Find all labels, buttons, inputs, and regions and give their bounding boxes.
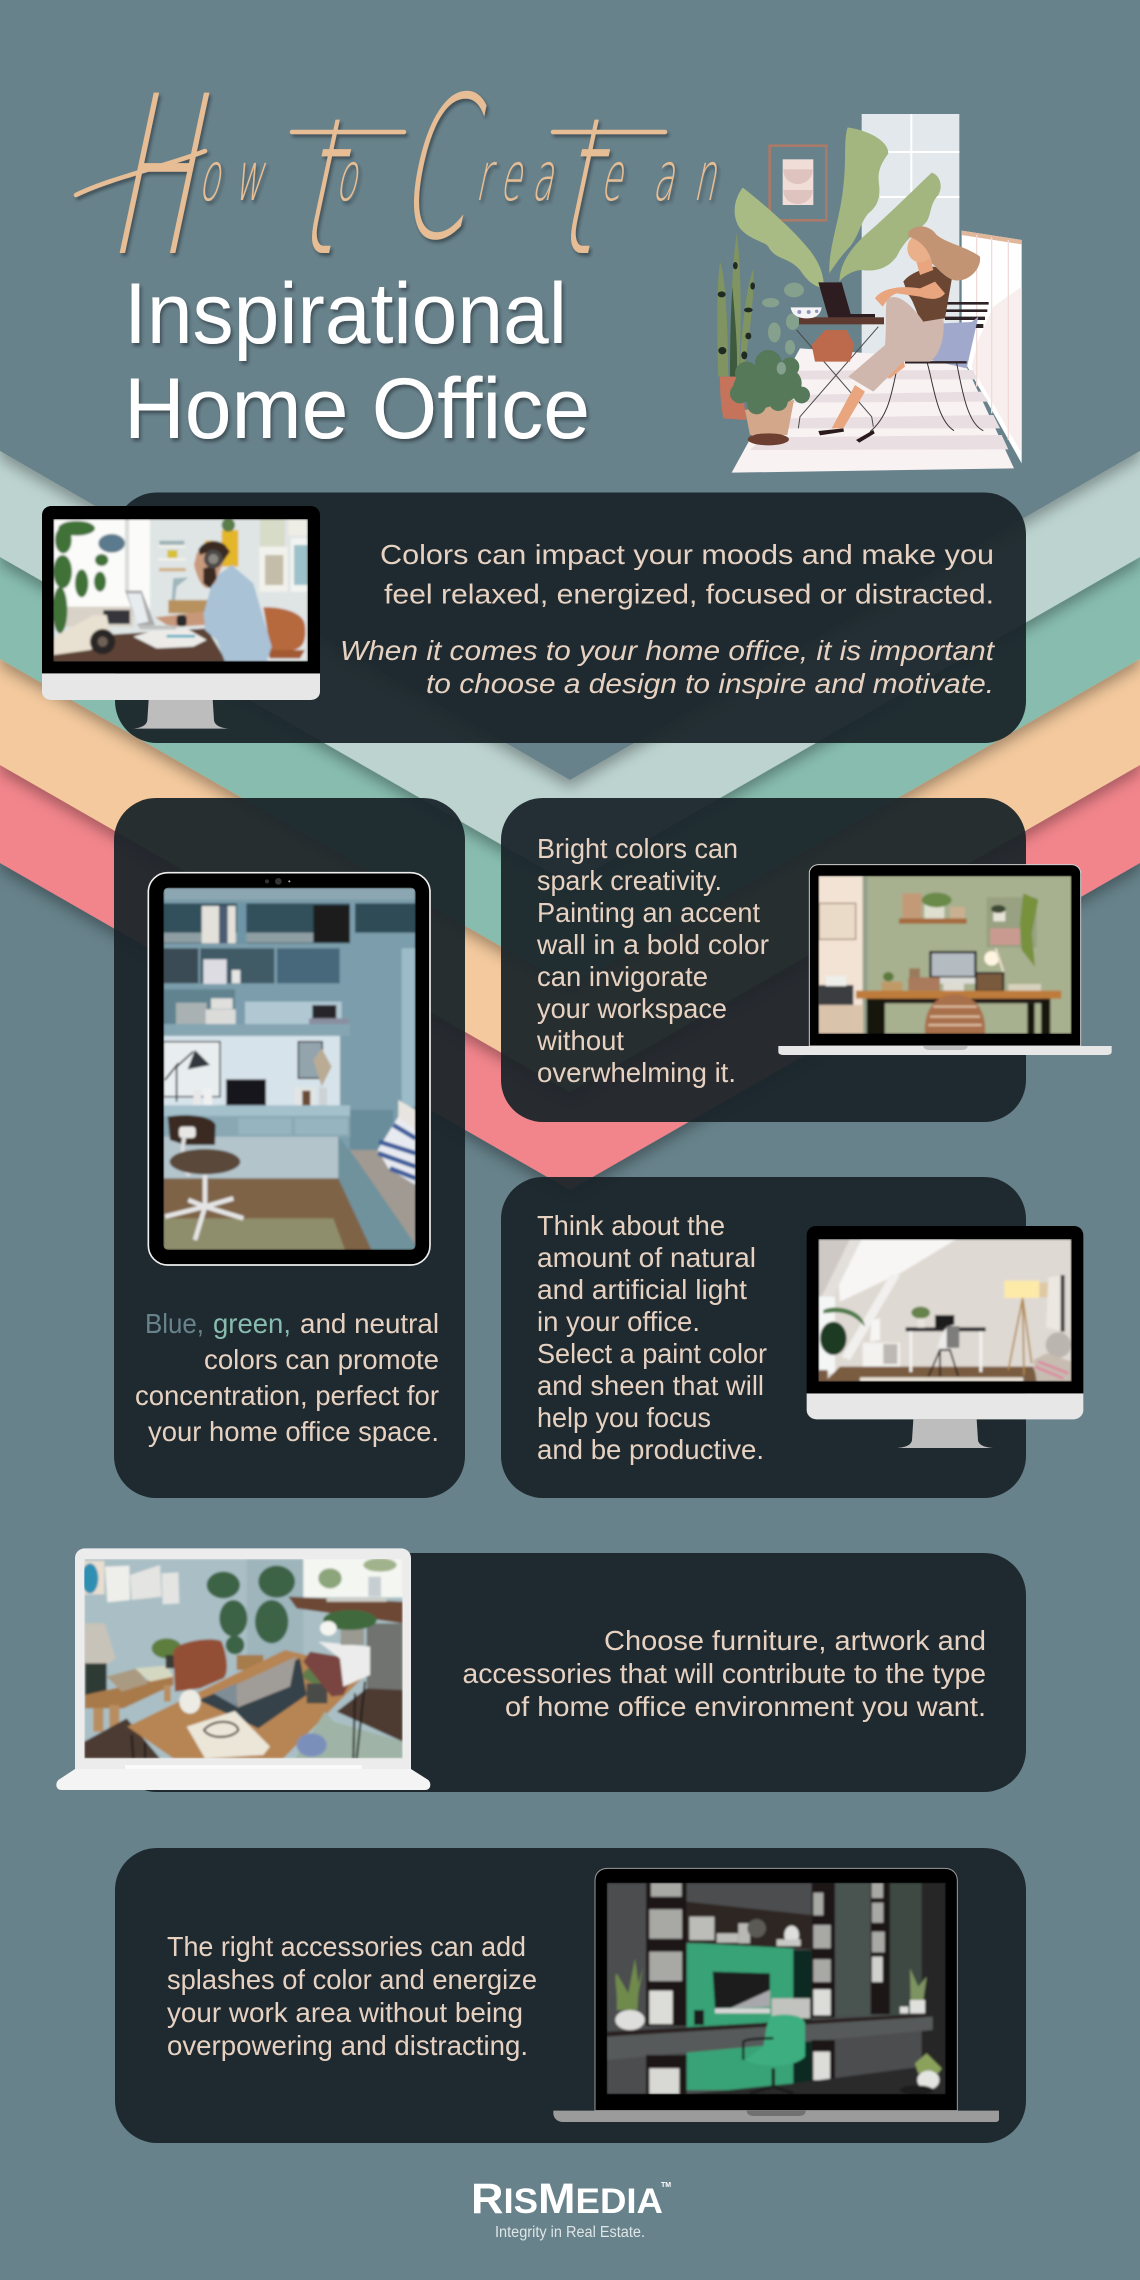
- title script line: o: [332, 137, 380, 216]
- illustration: woman working on balcony: [717, 114, 1022, 473]
- light text: help you focus: [537, 1402, 711, 1433]
- snake plant: [717, 233, 755, 377]
- bright colors text: wall in a bold color: [536, 929, 769, 960]
- light text: and artificial light: [537, 1274, 747, 1305]
- concentration text: concentration, perfect for: [135, 1380, 439, 1411]
- bright colors text: your workspace: [537, 993, 727, 1024]
- accessories text: splashes of color and energize: [167, 1964, 537, 1995]
- laptop with green wall photo: [778, 865, 1112, 1055]
- furniture text: of home office environment you want.: [505, 1691, 986, 1722]
- panel: furniture and accessories: [115, 1553, 1026, 1792]
- light text: amount of natural: [537, 1242, 756, 1273]
- intro text: [340, 539, 995, 699]
- potted green plant: [730, 350, 810, 445]
- title main heading: Inspirational: [124, 266, 567, 362]
- light text: and sheen that will: [537, 1370, 764, 1401]
- balcony wall: [962, 231, 1022, 463]
- concentration text: Blue,: [145, 1308, 204, 1339]
- title main heading: Home Office: [124, 361, 590, 457]
- dark laptop with green accent wall photo: [553, 1868, 999, 2122]
- title script line: an: [649, 137, 748, 216]
- title script line: rea: [472, 137, 576, 216]
- background chevron bands: [0, 0, 1140, 1190]
- title script line: t: [545, 78, 630, 299]
- striped floor: [732, 348, 1014, 473]
- woman: [818, 226, 980, 443]
- concentration text: your home office space.: [148, 1416, 439, 1447]
- title script line: t: [286, 78, 371, 299]
- monitor with white brick loft photo: [807, 1226, 1083, 1448]
- logo: RISMedia: [471, 2175, 671, 2241]
- terracotta pot: [720, 377, 747, 420]
- title script line: e: [597, 137, 645, 216]
- bright colors text: [536, 833, 769, 1088]
- accessories text: The right accessories can add: [167, 1931, 526, 1962]
- furniture text: [462, 1625, 986, 1722]
- title script line: C: [385, 56, 502, 284]
- accessories text: [167, 1931, 537, 2061]
- intro text: When it comes to your home office, it is important: [340, 635, 995, 666]
- light text: and be productive.: [537, 1434, 764, 1465]
- tablet with blue office photo: [148, 873, 430, 1265]
- panel: colors intro: [115, 492, 1026, 743]
- logo: RISMedia: Integrity in Real Estate.: [495, 2224, 645, 2241]
- light text: [537, 1210, 767, 1465]
- light text: Select a paint color: [537, 1338, 767, 1369]
- title script line: H: [95, 49, 232, 305]
- window: [862, 114, 959, 354]
- concentration text: and neutral: [300, 1308, 439, 1339]
- furniture text: accessories that will contribute to the type: [462, 1658, 986, 1689]
- title main heading: [124, 266, 590, 457]
- accessories text: overpowering and distracting.: [167, 2030, 528, 2061]
- panel: bright colors: [501, 798, 1026, 1122]
- bright colors text: can invigorate: [537, 961, 708, 992]
- bright colors text: Painting an accent: [537, 897, 760, 928]
- hanging vine: [762, 283, 804, 375]
- concentration text: green,: [213, 1308, 291, 1339]
- title script line: [76, 49, 766, 305]
- panel: natural and artificial light: [501, 1177, 1026, 1498]
- intro text: to choose a design to inspire and motivate.: [426, 668, 994, 699]
- logo: RISMedia: TM: [661, 2182, 671, 2189]
- title script line: ow: [195, 137, 316, 216]
- bright colors text: overwhelming it.: [537, 1057, 736, 1088]
- panel: blue green neutral colors: [114, 798, 465, 1498]
- accessories text: your work area without being: [167, 1997, 523, 2028]
- bright colors text: spark creativity.: [537, 865, 722, 896]
- intro text: Colors can impact your moods and make you: [380, 539, 994, 570]
- monitor with man at desk photo: [42, 506, 320, 729]
- bright colors text: without: [536, 1025, 624, 1056]
- framed picture: [770, 146, 826, 220]
- light text: Think about the: [537, 1210, 725, 1241]
- white laptop with desk and plants photo: [56, 1548, 430, 1790]
- concentration text: colors can promote: [204, 1344, 439, 1375]
- table with laptop and bowl: [791, 282, 884, 428]
- intro text: feel relaxed, energized, focused or distracted.: [384, 578, 994, 610]
- banana plant: [735, 127, 941, 288]
- furniture text: Choose furniture, artwork and: [604, 1625, 986, 1656]
- concentration text: [135, 1308, 439, 1447]
- bright colors text: Bright colors can: [537, 833, 738, 864]
- light text: in your office.: [537, 1306, 700, 1337]
- chair: [870, 302, 989, 432]
- panel: right accessories: [115, 1848, 1026, 2143]
- logo: RISMedia: RISMEDIA: [471, 2175, 663, 2223]
